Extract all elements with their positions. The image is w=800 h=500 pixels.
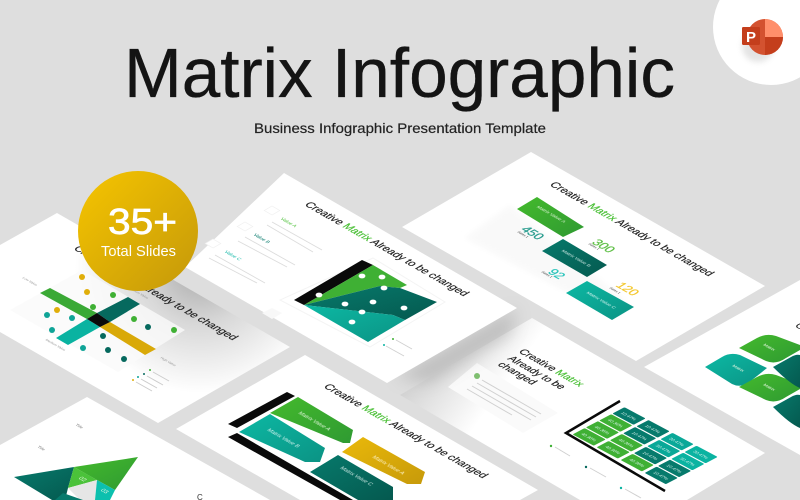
value B: Value B bbox=[251, 233, 272, 245]
axis labels: Title bbox=[74, 423, 86, 430]
stat captions: Sales 1 bbox=[540, 271, 554, 278]
stat captions bbox=[516, 231, 622, 294]
black axes bbox=[566, 401, 665, 491]
pyramid: small green 02 bbox=[68, 467, 97, 488]
teal arrow block bbox=[239, 414, 325, 462]
stat 300: 300 bbox=[588, 237, 619, 255]
value C bbox=[205, 239, 265, 283]
table cells: 10.47% bbox=[641, 451, 659, 461]
segment labels: 03 bbox=[98, 488, 110, 495]
slide heading: changed bbox=[494, 361, 539, 387]
leaf labels bbox=[731, 343, 777, 392]
slide: bottom centre arrows bbox=[176, 355, 538, 500]
legend bbox=[383, 338, 412, 356]
teal field bbox=[304, 305, 405, 342]
leaf: dark upper bbox=[773, 355, 800, 388]
leaf labels: Matrix bbox=[762, 343, 777, 352]
data points bbox=[316, 274, 407, 324]
slide heading: Already to be bbox=[504, 355, 568, 391]
pyramid: dark left segment bbox=[14, 467, 74, 500]
gold arrow block bbox=[342, 437, 425, 484]
slide heading: Creative Matrix Already to be changed bbox=[546, 180, 716, 278]
leaf: value A bbox=[739, 335, 800, 362]
green arrow block bbox=[270, 397, 353, 443]
table cells: 30.47% bbox=[668, 437, 686, 447]
box: Matrix Value C bbox=[566, 281, 634, 320]
icon: PowerPoint: P bbox=[746, 29, 756, 46]
axis labels: Title bbox=[36, 445, 48, 452]
leaf labels: Matrix bbox=[731, 364, 746, 373]
table cells: 40.36% bbox=[580, 432, 598, 442]
matrix dots bbox=[44, 274, 177, 362]
black centre bbox=[87, 313, 110, 327]
table cells: 30.47% bbox=[654, 444, 672, 454]
green band bbox=[40, 288, 97, 319]
badge: 35+ total slides: 35+ bbox=[108, 201, 177, 242]
segment labels: 02 bbox=[76, 476, 88, 483]
text card bbox=[448, 363, 558, 433]
matrix frame bbox=[280, 258, 445, 347]
table cells: 30.47% bbox=[678, 457, 696, 467]
pyramid: green segment bbox=[74, 457, 138, 490]
dark field bbox=[304, 286, 437, 320]
value B bbox=[237, 222, 295, 267]
slide: left cross matrix bbox=[0, 213, 290, 423]
value A bbox=[264, 206, 322, 252]
table cells: 30.47% bbox=[692, 450, 710, 460]
gold band bbox=[100, 322, 156, 355]
slide: centre diagonal matrix bbox=[185, 173, 517, 383]
green field bbox=[304, 265, 407, 305]
black band bbox=[294, 260, 373, 305]
axis labels: Medium Value bbox=[44, 338, 67, 351]
stat 92: 92 bbox=[544, 267, 569, 281]
teal arrow block: Matrix Value B bbox=[265, 428, 301, 449]
black side bar bbox=[228, 433, 353, 500]
shadow of centre slide bbox=[395, 308, 517, 382]
slide heading: Creative Matrix Already to be changed bbox=[320, 382, 490, 480]
card text lines bbox=[467, 380, 541, 420]
green arrow block: Matrix Value A bbox=[296, 411, 332, 432]
table cells: 10.47% bbox=[630, 431, 648, 441]
table cells: 40.36% bbox=[617, 438, 635, 448]
axis labels: Low Value bbox=[21, 276, 39, 286]
page pill bbox=[262, 308, 282, 319]
slide heading: Creative Matrix bbox=[515, 348, 587, 389]
segment labels bbox=[76, 476, 110, 495]
card icon bbox=[474, 373, 480, 379]
stat captions: Sales 1 bbox=[516, 231, 530, 238]
box: Matrix Value A: Matrix Value A bbox=[534, 205, 568, 224]
box: Matrix Value A bbox=[517, 197, 584, 237]
table cells bbox=[573, 407, 718, 484]
axis labels: Medium Value bbox=[127, 286, 150, 299]
pyramid: grey centre bbox=[68, 480, 97, 500]
pyramid: dark base bbox=[55, 493, 83, 500]
grid plate bbox=[10, 270, 185, 372]
table cells: 10.47% bbox=[665, 464, 683, 473]
slide: right leaf matrix bbox=[644, 280, 800, 455]
stat captions: Sales 1 bbox=[587, 243, 601, 250]
value A: Value A bbox=[278, 217, 299, 229]
slide: bottom left pyramid bbox=[0, 397, 270, 500]
badge: PowerPoint bbox=[713, 0, 800, 85]
table cells: 40.36% bbox=[628, 458, 646, 468]
dark block bbox=[310, 455, 393, 500]
value C: Value C bbox=[222, 250, 243, 262]
leaf labels: Matrix bbox=[762, 383, 777, 392]
slide heading: Creative Matrix Already to be changed bbox=[70, 244, 240, 342]
leaf: dark lower bbox=[773, 395, 800, 428]
axis labels bbox=[21, 276, 177, 367]
dark band bbox=[97, 297, 140, 322]
box: Matrix Value B bbox=[542, 239, 607, 277]
black header bar bbox=[228, 392, 295, 428]
stat 450: 450 bbox=[517, 224, 548, 242]
table cells: 40.36% bbox=[604, 445, 622, 455]
title: Matrix Infographic bbox=[124, 34, 675, 112]
dark block: Matrix Value C bbox=[338, 466, 374, 487]
table cells: 10.47% bbox=[620, 411, 638, 421]
legend bbox=[550, 445, 641, 498]
box: Matrix Value B: Matrix Value B bbox=[559, 249, 593, 268]
gold arrow block: Matrix Value A bbox=[370, 455, 406, 476]
pyramid: teal 03 bbox=[95, 480, 115, 500]
leaf: teal value bbox=[705, 354, 767, 386]
table cells: 10.47% bbox=[652, 471, 670, 480]
slide: bottom right table matrix bbox=[400, 318, 765, 500]
table cells: 10.47% bbox=[644, 424, 662, 434]
slide: top right numbers matrix bbox=[402, 152, 765, 361]
stat captions: Sales 1 bbox=[608, 287, 622, 294]
icon shadow bbox=[742, 30, 774, 62]
leaf: value B bbox=[739, 374, 800, 401]
axis labels bbox=[36, 423, 86, 452]
subtitle: Business Infographic Presentation Template bbox=[254, 120, 546, 136]
table cells: 40.36% bbox=[606, 418, 624, 428]
table cells: 40.36% bbox=[593, 425, 611, 435]
soft plate bbox=[465, 205, 630, 318]
legend bbox=[132, 369, 169, 391]
badge: 35+ total slides: Total Slides bbox=[101, 243, 176, 260]
box: Matrix Value C: Matrix Value C bbox=[584, 291, 618, 310]
slide heading: Creative Matrix Already to be changed bbox=[301, 200, 471, 298]
badge: 35+ total slides bbox=[78, 171, 198, 291]
teal band bbox=[56, 319, 100, 345]
stat 120: 120 bbox=[612, 280, 643, 298]
axis labels: High Value bbox=[159, 356, 177, 367]
